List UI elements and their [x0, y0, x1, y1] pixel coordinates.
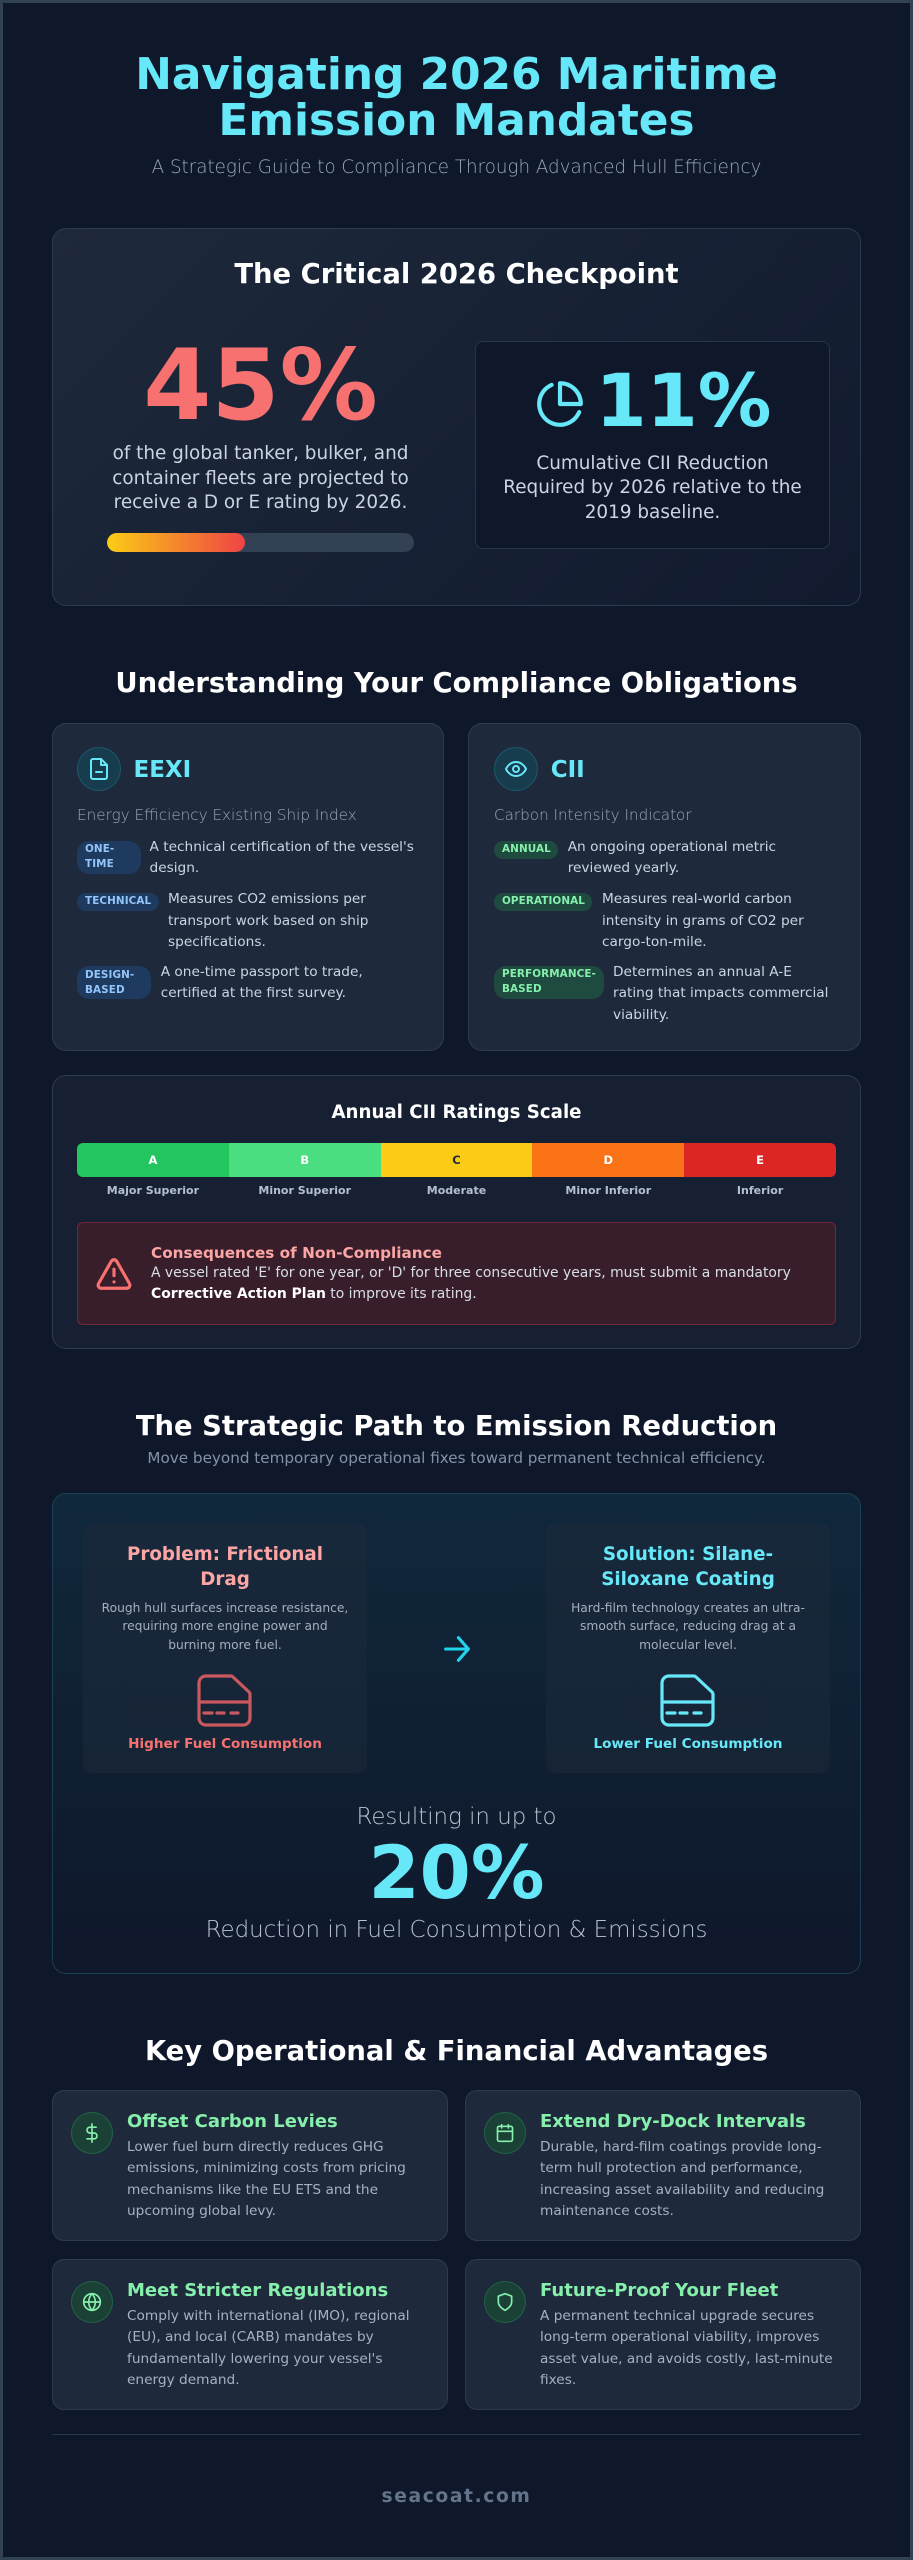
bar segments A to E [77, 1143, 836, 1177]
solution heading: Solution: Silane- [603, 1544, 773, 1564]
solution outcome: Lower Fuel Consumption [594, 1736, 782, 1752]
text: performance-based: rating that impacts commercial [613, 985, 828, 1001]
stat: 45 percent: 45% [143, 329, 378, 443]
stat description: CII reduction: Required by 2026 relative to the [503, 477, 802, 498]
callout heading: Consequences of Non-Compliance [151, 1244, 442, 1262]
tag: one-time [77, 840, 140, 874]
CII heading: CII [551, 757, 585, 783]
text: annual [568, 839, 776, 876]
heading: Future-Proof Your Fleet [540, 2280, 778, 2301]
bar labels: Minor Inferior [565, 1184, 651, 1196]
row: annual [494, 839, 776, 876]
CII subtitle: Carbon Intensity Indicator [494, 806, 692, 824]
problem text: requiring more engine power and [122, 1619, 328, 1633]
text: fixes. [540, 2372, 576, 2388]
icon: pie chart [537, 381, 583, 427]
tag: operational [494, 893, 592, 911]
solution text: Hard-film technology creates an ultra- [571, 1601, 805, 1615]
stat description: fleets: receive a D or E rating by 2026. [114, 492, 407, 513]
panel: CII [468, 723, 861, 1051]
callout body: A vessel rated 'E' for one year, or 'D' for three consecutive years, must submit a mandatory [151, 1264, 791, 1280]
text: increasing asset availability and reducing [540, 2182, 824, 2198]
heading: Meet Stricter Regulations [127, 2280, 388, 2301]
text: design-based: certified at the first survey. [161, 985, 346, 1001]
heading: advantages: Key Operational & Financial Advantages [145, 2036, 768, 2067]
callout body: Corrective Action Plan to improve its rating. [151, 1286, 477, 1302]
problem text: burning more fuel. [168, 1638, 282, 1652]
card: meet stricter regulations [52, 2259, 448, 2410]
progress bar 45 percent [107, 533, 414, 552]
row: one-time [77, 839, 414, 876]
text: Lower fuel burn directly reduces GHG [127, 2139, 384, 2155]
problem heading: Drag [200, 1568, 250, 1590]
icon: hull drive red [197, 1674, 252, 1727]
solution heading [601, 1544, 775, 1590]
solution heading: Siloxane Coating [601, 1568, 775, 1590]
subheading: strategic path: Move beyond temporary operational fixes toward permanent technical efficiency. [147, 1449, 766, 1467]
callout body [151, 1264, 791, 1302]
stat description: CII reduction: Cumulative CII Reduction [536, 452, 769, 474]
tag: performance-based: BASED [502, 983, 542, 995]
footer: seacoat.com: seacoat.com [382, 2486, 531, 2507]
bar segments A to E: A [148, 1153, 157, 1167]
bar segments A to E: D [604, 1153, 613, 1167]
text: Durable, hard-film coatings provide long- [540, 2139, 822, 2155]
stat description: CII reduction: 2019 baseline. [585, 502, 720, 522]
icon: globe [70, 2281, 112, 2323]
bar labels: Minor Superior [258, 1184, 351, 1196]
stat description: CII reduction [503, 452, 802, 522]
ratings heading: Annual CII Ratings Scale [331, 1102, 582, 1123]
panel: critical 2026 checkpoint [52, 228, 861, 606]
text: design-based: A one-time passport to trade, [161, 964, 363, 980]
text: mechanisms like the EU ETS and the [127, 2182, 378, 2198]
text: operational: cargo-ton-mile. [602, 934, 707, 950]
text [127, 2308, 410, 2388]
tag: annual: ANNUAL [502, 843, 551, 855]
text: design-based [160, 964, 363, 1001]
result caption: Reduction in Fuel Consumption & Emissions [206, 1917, 707, 1943]
stat: 11 percent: 11% [596, 359, 771, 444]
subtitle: A Strategic Guide to Compliance Through Advanced Hull Efficiency [152, 157, 761, 178]
bar segments A to E: B [300, 1153, 309, 1167]
tag: annual [494, 840, 558, 858]
text: A permanent technical upgrade secures [540, 2308, 814, 2324]
heading: compliance obligations: Understanding Your Compliance Obligations [115, 668, 798, 699]
ratings bar [77, 1143, 836, 1196]
icon: arrow [444, 1636, 470, 1662]
text: one-time: A technical certification of the vessel's [150, 839, 414, 855]
panel: EEXI [52, 723, 444, 1051]
text: term hull protection and performance, [540, 2160, 803, 2176]
solution text [571, 1601, 805, 1652]
text [540, 2308, 833, 2388]
text: technical: Measures CO2 emissions per [168, 891, 366, 907]
panel: CII ratings scale [52, 1075, 861, 1349]
stat description: fleets: of the global tanker, bulker, and [113, 443, 408, 464]
text: technical [168, 891, 368, 950]
text: technical: specifications. [168, 934, 266, 950]
stat description: fleets [112, 443, 409, 513]
problem heading [127, 1544, 323, 1590]
icon: document [77, 747, 121, 791]
text: performance-based [613, 964, 828, 1023]
bar segments A to E: C [452, 1153, 461, 1167]
text: annual: reviewed yearly. [568, 860, 679, 876]
EEXI subtitle: Energy Efficiency Existing Ship Index [77, 806, 357, 824]
panel: solution [546, 1523, 830, 1773]
icon: eye [494, 747, 538, 791]
tag: operational: OPERATIONAL [502, 895, 585, 907]
text: fundamentally lowering your vessel's [127, 2351, 382, 2367]
bar labels: Inferior [737, 1184, 783, 1196]
panel: 11 percent callout [475, 341, 830, 549]
text: upcoming global levy. [127, 2203, 276, 2219]
panel: strategic path [52, 1493, 861, 1974]
text: operational: intensity in grams of CO2 per [602, 913, 804, 929]
bar labels [107, 1184, 784, 1196]
text [540, 2139, 824, 2219]
text: one-time [150, 839, 414, 876]
icon: shield [484, 2281, 526, 2323]
text: Comply with international (IMO), regional [127, 2308, 410, 2324]
card: extend dry-dock intervals [465, 2090, 861, 2241]
icon: warning triangle [96, 1258, 132, 1290]
text: operational [602, 891, 804, 950]
text: operational: Measures real-world carbon [602, 891, 792, 907]
stat: 20 percent: 20% [369, 1831, 544, 1916]
tag: performance-based: PERFORMANCE- [502, 968, 596, 980]
solution text: molecular level. [639, 1638, 737, 1652]
text: performance-based: viability. [613, 1007, 669, 1023]
problem heading: Problem: Frictional [127, 1544, 323, 1564]
tag: technical [77, 893, 158, 911]
EEXI heading: EEXI [134, 757, 191, 783]
text: annual: An ongoing operational metric [568, 839, 776, 855]
bar segments A to E: E [756, 1153, 764, 1167]
text: performance-based: Determines an annual A-E [613, 964, 792, 980]
text: emissions, minimizing costs from pricing [127, 2160, 406, 2176]
heading: Offset Carbon Levies [127, 2111, 338, 2132]
row: design-based [77, 964, 363, 1001]
bar labels: Major Superior [107, 1184, 199, 1196]
icon: dollar [70, 2112, 112, 2154]
text: maintenance costs. [540, 2203, 674, 2219]
checkpoint heading: The Critical 2026 Checkpoint [234, 259, 679, 290]
panel: problem [83, 1523, 367, 1773]
text: asset value, and avoids costly, last-minute [540, 2351, 833, 2367]
heading: Extend Dry-Dock Intervals [540, 2111, 806, 2132]
text: long-term operational viability, improves [540, 2329, 819, 2345]
problem outcome: Higher Fuel Consumption [128, 1736, 322, 1752]
solution text: smooth surface, reducing drag at a [580, 1619, 796, 1633]
bar labels: Moderate [427, 1184, 486, 1196]
icon: hull drive cyan [660, 1674, 715, 1727]
problem text: Rough hull surfaces increase resistance, [102, 1601, 348, 1615]
tag: one-time: TIME [85, 858, 114, 870]
text: energy demand. [127, 2372, 240, 2388]
heading: strategic path: The Strategic Path to Emission Reduction [136, 1411, 777, 1442]
tag: technical: TECHNICAL [85, 895, 151, 907]
row: operational [494, 891, 804, 950]
text: (EU), and local (CARB) mandates by [127, 2329, 374, 2345]
callout: consequences of non-compliance [77, 1222, 836, 1325]
card: offset carbon levies [52, 2090, 448, 2241]
title [135, 49, 778, 146]
title: Navigating 2026 Maritime [135, 49, 778, 100]
row: performance-based [494, 964, 828, 1023]
title: Emission Mandates [218, 95, 695, 146]
tag: performance-based [494, 966, 604, 998]
text: one-time: design. [150, 860, 199, 876]
stat description: fleets: container fleets are projected to [112, 468, 409, 489]
tag: design-based [77, 966, 150, 999]
text [127, 2139, 406, 2219]
tag: one-time: ONE- [85, 843, 114, 855]
row: technical [77, 891, 368, 950]
result lead-in: Resulting in up to [356, 1804, 557, 1830]
text: technical: transport work based on ship [168, 913, 368, 929]
tag: design-based: DESIGN- [85, 968, 134, 980]
tag: design-based: BASED [85, 984, 125, 996]
icon: calendar [484, 2112, 526, 2154]
problem text [102, 1601, 348, 1652]
card: future-proof your fleet [465, 2259, 861, 2410]
